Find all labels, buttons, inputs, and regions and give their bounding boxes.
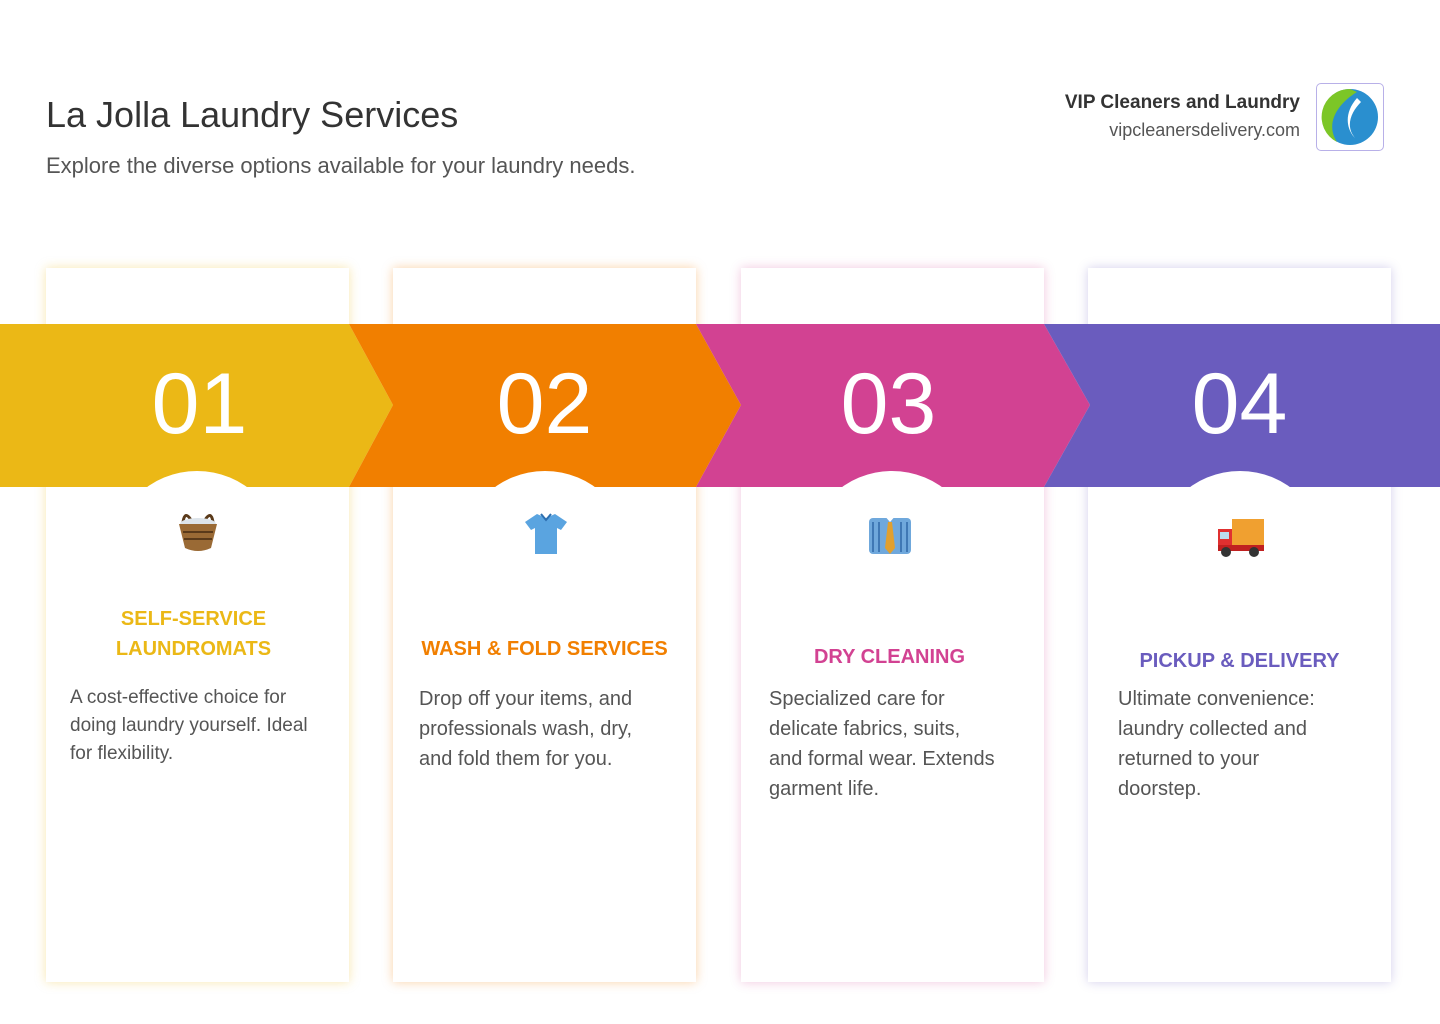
card 4 text: Ultimate convenience: laundry collected and returned to your doorstep.: [1118, 688, 1315, 800]
numbers: 01: [152, 356, 247, 452]
card 1 text: A cost-effective choice for doing laundry yourself. Ideal for flexibility.: [70, 687, 308, 764]
card 1 text: SELF-SERVICE: [121, 608, 266, 630]
cards: [46, 268, 349, 982]
title: La Jolla Laundry Services: [46, 94, 458, 135]
subtitle: Explore the diverse options available for your laundry needs.: [46, 153, 635, 178]
card 3 text: garment life.: [769, 778, 879, 800]
icon: basket: [179, 514, 217, 551]
card 2 text: WASH & FOLD SERVICES: [421, 638, 668, 660]
card 1 text: [70, 608, 308, 764]
text: 03: [841, 356, 936, 452]
card 1 text: LAUNDROMATS: [116, 638, 271, 660]
icon: shirt: [525, 513, 567, 554]
icon: truck: [1218, 519, 1264, 557]
card 3 text: DRY CLEANING: [814, 646, 965, 668]
brand: [1065, 92, 1300, 140]
icon: shirt with tie: [869, 518, 911, 554]
card 3 text: Specialized care for: [769, 688, 945, 710]
card 3 text: [769, 646, 995, 800]
card 3 text: and formal wear. Extends: [769, 748, 995, 770]
card 3 text: delicate fabrics, suits,: [769, 718, 960, 740]
text: 02: [497, 356, 592, 452]
brand: vipcleanersdelivery.com: [1109, 120, 1300, 140]
card 4 text: PICKUP & DELIVERY: [1139, 650, 1340, 672]
text: 04: [1192, 356, 1287, 452]
icon: logo: [1316, 83, 1384, 151]
card 2 text: [419, 638, 668, 770]
brand: VIP Cleaners and Laundry: [1065, 92, 1300, 113]
card 2 text: Drop off your items, and professionals wash, dry, and fold them for you.: [419, 688, 632, 770]
card 4 text: [1118, 650, 1340, 800]
